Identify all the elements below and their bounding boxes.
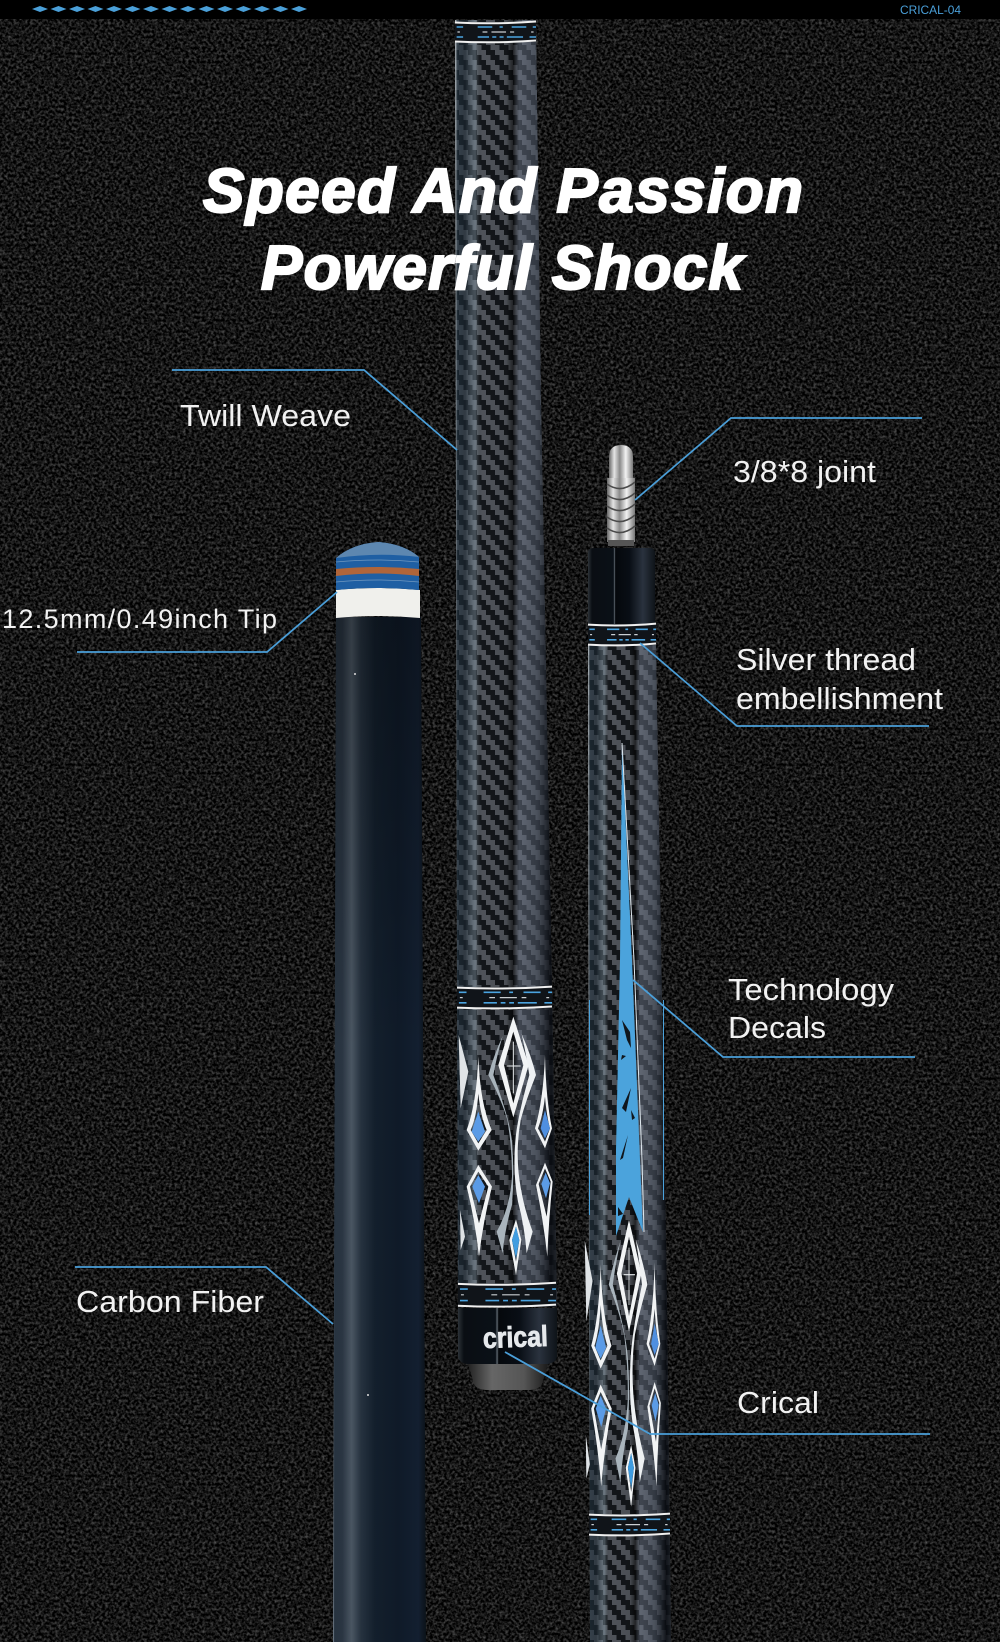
title: Powerful Shock [261,234,747,303]
callout: tip size [2,592,337,652]
callout: crical: Crical [737,1385,819,1420]
lower ring [458,1283,556,1307]
title [203,157,803,303]
callout: silver thread: embellishment [736,681,943,716]
callout: technology decals: Technology [728,972,895,1007]
carbon twill shaft [455,20,557,1307]
callout: Twill Weave [172,370,457,450]
lower ring [589,1514,670,1535]
header bar [0,0,1000,19]
cue forearm: right carbon piece [585,445,671,1642]
blue technology decal [616,743,644,1236]
callout: technology decals: Decals [728,1010,826,1045]
icon: row of blue diamonds [32,6,307,12]
callout: carbon fiber [75,1267,333,1324]
black butt cap [458,1308,557,1364]
callout: joint [635,418,922,500]
upper ring [588,624,656,645]
bumper [468,1364,548,1390]
cue shaft: left navy piece [333,542,426,1642]
diamond inlay [585,1220,661,1507]
callout: Twill Weave: Twill Weave [180,398,351,433]
crical logo: crical [482,1321,548,1355]
top ring [455,22,536,42]
cue butt: centre carbon piece [455,20,557,1390]
model code: CRICAL-04 [900,3,961,17]
callout: joint: 3/8*8 joint [733,454,876,489]
callout: carbon fiber: Carbon Fiber [76,1284,264,1319]
carbon forearm [588,644,671,1642]
callout: crical [505,1352,930,1434]
joint pin [607,445,635,546]
navy carbon shaft [333,617,426,1642]
callout: technology decals [633,972,915,1057]
upper ring [457,987,552,1008]
title: Speed And Passion [203,157,803,226]
diamond inlay [459,1017,553,1275]
black joint collar [588,548,655,624]
callout: silver thread [640,642,943,726]
callout: tip size: 12.5mm/0.49inch Tip [2,604,277,634]
thin blue side lines [590,1000,664,1215]
white ferrule [336,588,420,618]
callout: silver thread: Silver thread [736,642,916,677]
layered tip [336,542,419,590]
